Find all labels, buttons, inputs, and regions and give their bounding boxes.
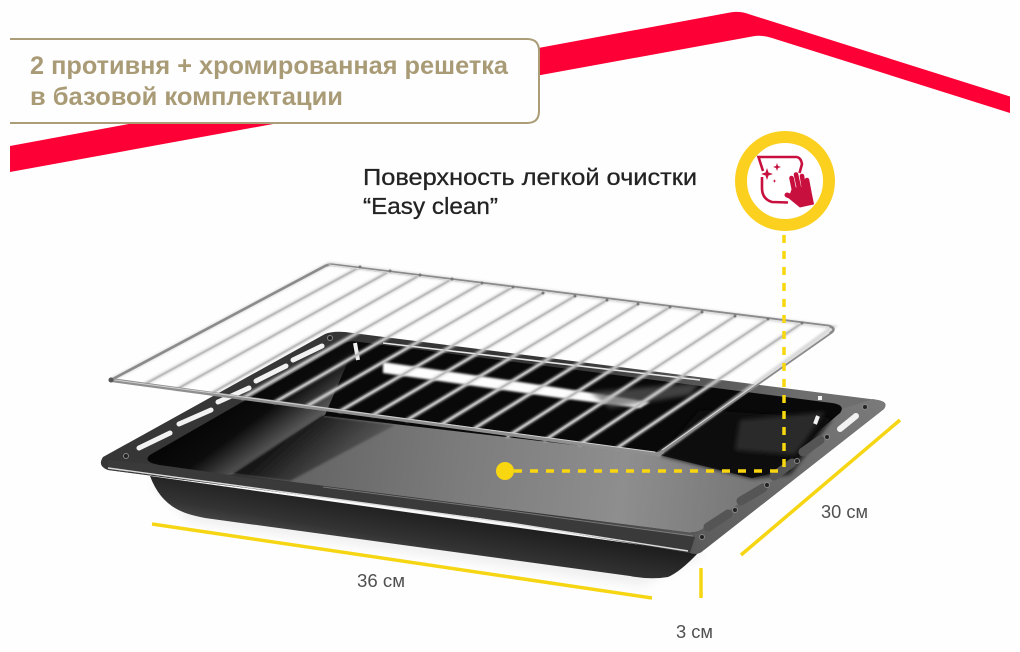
- tray body: [150, 476, 698, 578]
- tray rim: [101, 332, 886, 554]
- rack frame highlight: [329, 265, 829, 450]
- rack corner: [108, 378, 114, 382]
- rack wire shadows: [111, 264, 833, 454]
- lower rim edge: [323, 487, 693, 536]
- red ribbon: [10, 12, 1010, 172]
- dimension: width: [741, 420, 900, 555]
- rim holes: [124, 336, 868, 540]
- rim highlight: [108, 468, 688, 551]
- dimension: height: [676, 568, 713, 642]
- back wall highlight: [383, 362, 650, 408]
- dimension: width: 30 см: [821, 502, 868, 522]
- corner highlight: [355, 343, 822, 424]
- rack front highlight: [115, 380, 655, 452]
- tray front rim: [108, 460, 695, 553]
- icon: easy clean badge: [741, 137, 829, 225]
- rack back and side frame: [111, 265, 833, 452]
- inner back edge highlight: [383, 343, 700, 380]
- title text: в базовой комплектации: [30, 83, 343, 111]
- icon: sparkles: [761, 163, 781, 183]
- heading: easy clean surface: “Easy clean”: [363, 193, 498, 219]
- wire rack: [108, 264, 833, 454]
- title text: 2 противня + хромированная решетка: [30, 52, 509, 80]
- tray shadow halo: [150, 482, 700, 586]
- right wall sheen: [735, 412, 825, 455]
- dimension: length: [152, 524, 652, 598]
- tray: [101, 332, 886, 586]
- rack front frame: [111, 380, 662, 454]
- tray right rim: [694, 399, 885, 550]
- rack wires: [145, 267, 802, 448]
- tray well: [148, 341, 842, 532]
- rim slots left: [139, 346, 322, 448]
- dimension: height: 3 см: [676, 622, 713, 642]
- right wall dark reflection: [660, 410, 832, 478]
- rack knots: [358, 266, 804, 324]
- rim slots right: [708, 416, 856, 527]
- back wall sheen: [590, 383, 700, 408]
- dimension: length: 36 см: [357, 571, 405, 591]
- icon: hand: [787, 174, 814, 207]
- tray left wall: [148, 343, 355, 475]
- title box: [10, 39, 539, 123]
- heading: easy clean surface: [363, 164, 697, 219]
- tray floor: [230, 416, 788, 532]
- title text: [30, 52, 509, 111]
- callout dot: [496, 462, 514, 480]
- icon: cloth outline: [758, 157, 802, 202]
- floor reflection: [232, 416, 395, 481]
- heading: easy clean surface: Поверхность легкой очистки: [363, 164, 697, 190]
- callout dashed line: [496, 235, 784, 480]
